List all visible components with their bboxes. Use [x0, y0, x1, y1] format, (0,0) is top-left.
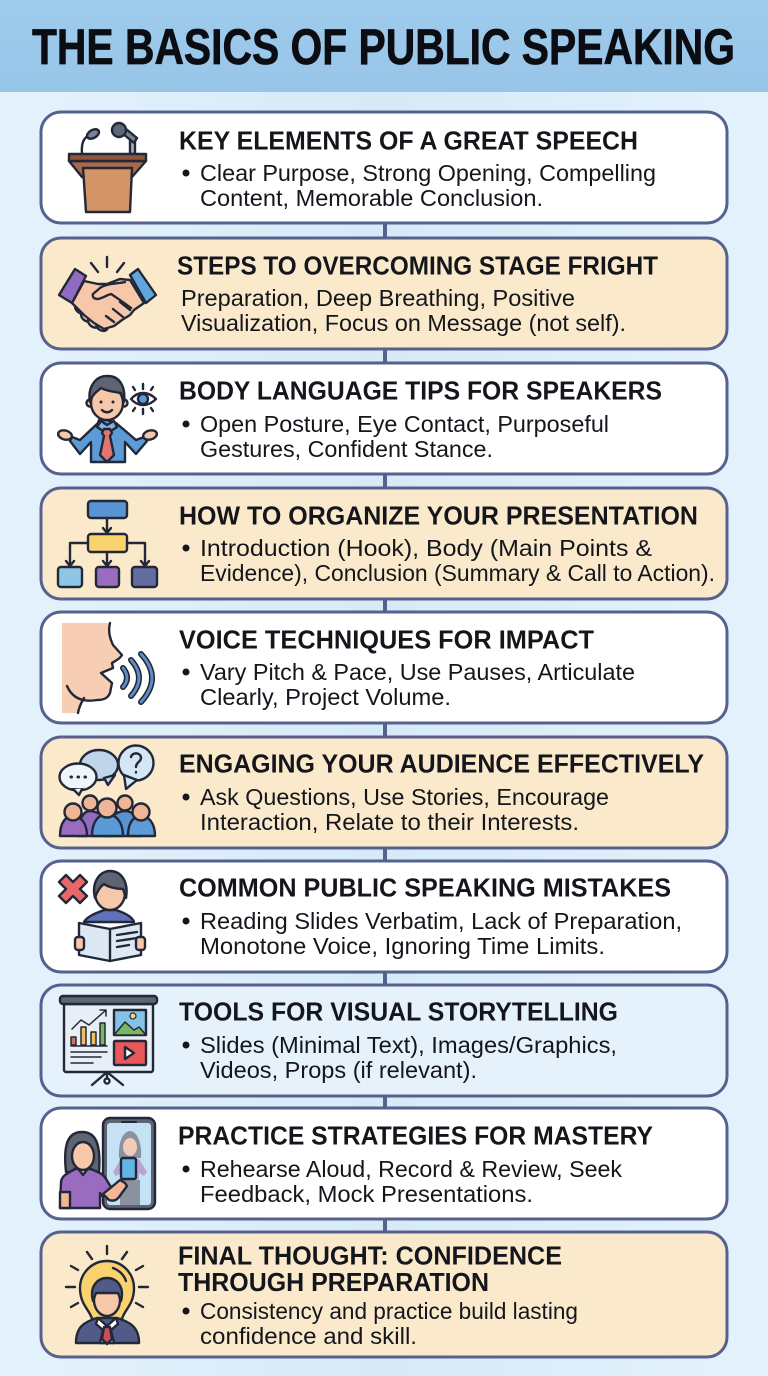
bullet text: Rehearse Aloud, Record & Review, Seek [200, 1156, 622, 1182]
bullet text [182, 908, 682, 959]
bullet text: Open Posture, Eye Contact, Purposeful [200, 411, 609, 437]
icon: speaker with eye [57, 376, 158, 462]
bullet text [182, 1156, 622, 1207]
panel: engaging audience [41, 737, 727, 848]
icon: flowchart [58, 501, 157, 587]
heading: FINAL THOUGHT: CONFIDENCE [178, 1240, 562, 1270]
icon: person with light bulb [66, 1246, 148, 1344]
heading: STEPS TO OVERCOMING STAGE FRIGHT [177, 250, 658, 280]
heading: COMMON PUBLIC SPEAKING MISTAKES [179, 872, 671, 902]
body text: Visualization, Focus on Message (not self). [181, 310, 626, 336]
bullet text: Clearly, Project Volume. [200, 684, 451, 710]
panel: practice strategies [41, 1108, 727, 1219]
icon: podium with microphones [69, 123, 146, 212]
bullet text: Feedback, Mock Presentations. [200, 1181, 533, 1207]
panel: key elements [41, 112, 727, 223]
bullet text: Evidence), Conclusion (Summary & Call to Action). [200, 560, 715, 586]
body text: Preparation, Deep Breathing, Positive [181, 285, 575, 311]
bullet text [182, 535, 715, 586]
bullet text [182, 1298, 578, 1349]
bullet text: Reading Slides Verbatim, Lack of Preparation, [200, 908, 682, 934]
bullet text [182, 659, 635, 710]
header band [0, 0, 768, 92]
panel: final thought [41, 1232, 727, 1357]
panel: organize presentation [41, 488, 727, 599]
bullet text: Slides (Minimal Text), Images/Graphics, [200, 1032, 617, 1058]
heading: VOICE TECHNIQUES FOR IMPACT [179, 624, 594, 654]
bullet text: Content, Memorable Conclusion. [200, 185, 543, 211]
icon: handshake [59, 257, 156, 333]
heading: THROUGH PREPARATION [178, 1267, 489, 1297]
bullet text [182, 1032, 617, 1083]
bullet text [182, 160, 656, 211]
bullet text: Gestures, Confident Stance. [200, 436, 493, 462]
bullet text [182, 784, 609, 835]
bullet text: Videos, Props (if relevant). [200, 1057, 477, 1083]
heading [178, 1240, 562, 1297]
bullet text: Ask Questions, Use Stories, Encourage [200, 784, 609, 810]
panel: common mistakes [41, 861, 727, 972]
heading: PRACTICE STRATEGIES FOR MASTERY [178, 1120, 653, 1150]
icon: presentation board [60, 996, 157, 1085]
icon: person reading with red X [59, 871, 145, 961]
bullet text: Monotone Voice, Ignoring Time Limits. [200, 933, 605, 959]
icon: audience with speech bubbles [60, 746, 155, 836]
icon: person recording on phone [60, 1118, 155, 1209]
panel: stage fright [41, 238, 727, 349]
bullet text: Introduction (Hook), Body (Main Points & [200, 535, 652, 561]
bullet text: confidence and skill. [200, 1323, 417, 1349]
icon: speaking profile with sound waves [62, 623, 152, 713]
bullet text: Vary Pitch & Pace, Use Pauses, Articulate [200, 659, 635, 685]
panel: voice techniques [41, 612, 727, 723]
body text [181, 285, 626, 336]
panel: body language [41, 363, 727, 474]
connector line [383, 224, 387, 1232]
heading: TOOLS FOR VISUAL STORYTELLING [179, 996, 618, 1026]
panel: visual storytelling [41, 985, 727, 1096]
bullet text: Interaction, Relate to their Interests. [200, 809, 579, 835]
bullet text [182, 411, 609, 462]
heading: ENGAGING YOUR AUDIENCE EFFECTIVELY [179, 748, 704, 778]
bullet text: Consistency and practice build lasting [200, 1298, 578, 1324]
bullet text: Clear Purpose, Strong Opening, Compelling [200, 160, 656, 186]
heading: BODY LANGUAGE TIPS FOR SPEAKERS [179, 376, 662, 406]
heading: HOW TO ORGANIZE YOUR PRESENTATION [179, 500, 698, 530]
heading: KEY ELEMENTS OF A GREAT SPEECH [179, 126, 638, 156]
